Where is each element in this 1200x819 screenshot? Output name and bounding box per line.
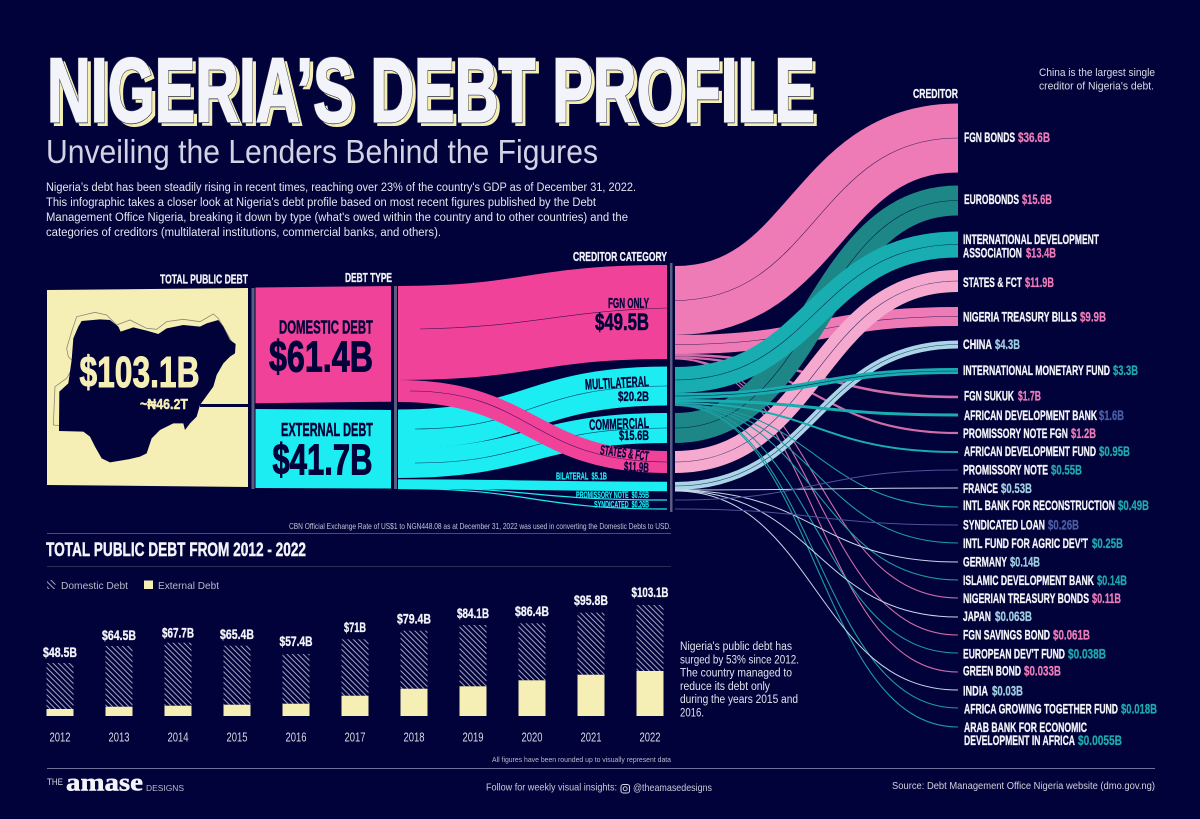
chart annotation: Nigeria's public debt has [680, 641, 792, 653]
label: Nigerian treasury bonds: $0.11B [1092, 591, 1121, 606]
bar 2016: $57.4B [280, 633, 312, 649]
heading: creditor category: CREDITOR CATEGORY [573, 250, 667, 264]
label: IFAD: $0.25B [1092, 536, 1123, 551]
bar 2022: $103.1B [632, 584, 668, 600]
flow: syndicated [398, 488, 667, 509]
bar 2019: $84.1B [457, 605, 489, 621]
flow: multilateral [398, 386, 667, 429]
label: China: $4.3B [995, 337, 1020, 352]
divider bar 2 [394, 286, 397, 489]
label: FGN savings bond: FGN SAVINGS BOND [963, 628, 1050, 642]
chart heading: TOTAL PUBLIC DEBT FROM 2012 - 2022 [46, 539, 306, 561]
divider bar 3 [670, 263, 672, 512]
flow: commercial [398, 428, 667, 463]
heading: creditor: CREDITOR [913, 87, 958, 101]
sankey: creditor category to creditor [675, 138, 958, 727]
chart annotation: The country managed to [680, 668, 792, 680]
label: states and FCT: $11.9B [624, 459, 650, 475]
divider bar 1 [252, 288, 254, 489]
bar 2021: $95.8B [574, 592, 608, 608]
flow: international development association [675, 244, 958, 380]
social follow line: Follow for weekly visual insights: [486, 782, 617, 794]
social follow line [486, 782, 712, 794]
label: Arab Bank: $0.0055B [1078, 733, 1122, 748]
bar 2012 [43, 644, 77, 744]
label: promissory note: $0.55B [1051, 462, 1082, 478]
label: Japan [963, 609, 1032, 624]
flow: promissory note [398, 488, 667, 500]
category labels [556, 296, 650, 510]
heading: debt type: DEBT TYPE [345, 271, 392, 285]
bar 2017: $71B [344, 619, 366, 635]
flow: thin multilateral lenders [675, 404, 958, 727]
logo: the amase designs: amase [66, 770, 143, 796]
flow: FGN bonds [675, 138, 958, 300]
chart legend [47, 580, 219, 592]
bar 2017 [342, 619, 368, 744]
label: FGN only: FGN ONLY [608, 296, 649, 312]
label: India: $0.03B [992, 684, 1023, 698]
title: NIGERIA’S DEBT PROFILE [47, 40, 815, 142]
intro paragraph: categories of creditors (multilateral institutions, commercial banks, and others). [46, 227, 441, 239]
intro paragraph: Nigeria’s debt has been steadily rising in recent times, reaching over 23% of the country's GDP as of December 31, 2022. [46, 182, 636, 194]
label: European dev't fund: $0.038B [1068, 646, 1106, 662]
intro paragraph [46, 182, 636, 239]
label: promissory FGN: PROMISSORY NOTE FGN [963, 426, 1068, 441]
label: states and FCT: STATES & FCT [599, 442, 650, 464]
label: treasury bills: NIGERIA TREASURY BILLS [963, 310, 1077, 324]
label: Arab Bank [964, 720, 1122, 748]
label: France: FRANCE [963, 481, 998, 496]
label: FGN sukuk: FGN SUKUK [964, 388, 1014, 404]
label: Arab Bank: DEVELOPMENT IN AFRICA [964, 733, 1075, 748]
label: eurobonds: $15.6B [1022, 192, 1052, 207]
label: IFAD: INTL FUND FOR AGRIC DEV'T [963, 536, 1088, 551]
panel: total public debt map [47, 288, 248, 487]
bar 2013: 2013 [108, 730, 130, 744]
creditor labels [963, 130, 1157, 748]
label: IDA: $13.4B [1026, 246, 1056, 260]
label: Africa Growing Together Fund: AFRICA GROWING TOGETHER FUND [964, 702, 1118, 716]
label: promissory FGN: $1.2B [1071, 426, 1096, 441]
icon: instagram [621, 784, 630, 793]
bar 2018 [397, 610, 431, 744]
flow: bilateral [398, 484, 667, 486]
label: India [963, 684, 1023, 698]
label: bilateral: BILATERAL $5.1B [556, 470, 607, 482]
label: syndicated loan: $0.26B [1048, 518, 1079, 532]
label: ADF: $0.95B [1099, 444, 1130, 459]
label: China: CHINA [963, 337, 992, 352]
logo: the amase designs: THE [47, 777, 63, 787]
bar 2021: 2021 [580, 730, 602, 744]
label: promissory note: PROMISSORY NOTE [963, 462, 1048, 478]
bar 2018: $79.4B [397, 610, 431, 626]
label: Nigerian treasury bonds: NIGERIAN TREASURY BONDS [963, 591, 1089, 606]
label: green bond: GREEN BOND [963, 664, 1021, 678]
title: NIGERIA’S DEBT PROFILE [47, 40, 815, 142]
bar 2020: $86.4B [515, 603, 549, 619]
note: China largest creditor: creditor of Nigeria's debt. [1039, 80, 1154, 92]
bar 2016 [280, 633, 312, 744]
bar 2013 [102, 627, 136, 744]
title: NIGERIA’S DEBT PROFILE [50, 44, 818, 145]
panel: domestic debt: $61.4B [269, 332, 373, 382]
chart annotation: during the years 2015 and [680, 694, 798, 706]
label: syndicated loan: SYNDICATED LOAN [963, 518, 1045, 532]
chart annotation [680, 641, 799, 719]
label: European dev't fund: EUROPEAN DEV'T FUND [963, 646, 1065, 662]
flow: teal multilateral lenders [675, 371, 958, 452]
flow: Nigeria treasury bills [675, 316, 958, 344]
label: IDA: ASSOCIATION [963, 246, 1022, 260]
bar 2015: $65.4B [220, 626, 254, 642]
intro paragraph: This infographic takes a closer look at Nigeria's debt profile based on most recent figures published by the Debt [46, 197, 597, 209]
label: multilateral [585, 373, 649, 404]
rounding note: All figures have been rounded up to visually represent data [492, 755, 672, 764]
label: states: STATES & FCT [963, 275, 1022, 290]
flow: FGN only [398, 308, 667, 333]
bar 2017: 2017 [344, 730, 366, 744]
label: FGN bonds: FGN BONDS [964, 130, 1015, 145]
flow: pink small lenders [675, 355, 958, 672]
bar 2014 [162, 624, 194, 744]
bar 2019 [457, 605, 489, 744]
label: FGN only: $49.5B [595, 309, 649, 336]
note: China largest creditor [1039, 67, 1155, 92]
bar 2012: $48.5B [43, 644, 77, 660]
label: green bond: $0.033B [1024, 664, 1061, 678]
label: FGN bonds: $36.6B [1018, 130, 1050, 145]
label: Germany: $0.14B [1010, 554, 1040, 570]
bar 2020: 2020 [522, 730, 542, 744]
flow: promissory note and syndicated loan [675, 470, 958, 525]
label: Arab Bank: ARAB BANK FOR ECONOMIC [964, 720, 1087, 735]
heading: total public debt: TOTAL PUBLIC DEBT [160, 272, 248, 286]
bar 2014: 2014 [168, 730, 188, 744]
label: promissory note: PROMISSORY NOTE $0.55B [576, 490, 649, 500]
label: IBRD: $0.49B [1118, 498, 1149, 513]
source: Source: Debt Management Office Nigeria website (dmo.gov.ng) [892, 781, 1155, 792]
note: China largest creditor: China is the largest single [1039, 67, 1155, 79]
bar 2022 [632, 584, 668, 744]
bar 2021 [574, 592, 608, 744]
label: Japan: JAPAN [963, 609, 991, 624]
label: FGN savings bond: $0.061B [1053, 628, 1090, 642]
label: states and FCT [599, 442, 650, 475]
sankey: debt type to creditor category [398, 308, 667, 509]
chart annotation: surged by 53% since 2012. [680, 654, 799, 666]
label: commercial: COMMERCIAL [589, 415, 649, 434]
icon: Nigeria map [53, 312, 236, 462]
social follow line: @theamasedesigns [633, 782, 712, 794]
chart annotation: 2016. [680, 707, 704, 719]
label: FGN only [595, 296, 649, 336]
label: treasury bills: $9.9B [1080, 310, 1106, 324]
label: France: $0.53B [1001, 481, 1032, 496]
bar 2013: $64.5B [102, 627, 136, 643]
title [47, 40, 818, 145]
label: AfDB: AFRICAN DEVELOPMENT BANK [964, 408, 1097, 423]
panel: total public debt map: ~₦46.2T [140, 396, 188, 413]
label: multilateral: $20.2B [618, 388, 649, 404]
panel: external debt [256, 409, 391, 488]
label: Islamic Development Bank: $0.14B [1097, 573, 1127, 588]
label: Islamic Development Bank: ISLAMIC DEVELOPMENT BANK [963, 573, 1094, 588]
label: ADF: AFRICAN DEVELOPMENT FUND [964, 444, 1096, 459]
label: eurobonds: EUROBONDS [964, 192, 1019, 207]
label: Germany: GERMANY [963, 554, 1007, 570]
flow: eurobonds [675, 200, 958, 428]
bar 2015: 2015 [226, 730, 248, 744]
label: IMF: INTERNATIONAL MONETARY FUND [963, 363, 1110, 378]
label: syndicated: SYNDICATED $0.26B [594, 500, 649, 510]
panel: domestic debt [256, 286, 391, 403]
chart annotation: reduce its debt only [680, 681, 770, 693]
logo: the amase designs [47, 770, 184, 796]
flow: states and FCT [675, 281, 958, 462]
exchange rate footnote: CBN Official Exchange Rate of US$1 to NGN448.08 as at December 31, 2022 was used in converting the Domestic Debts to USD. [289, 521, 671, 531]
bar 2022: 2022 [640, 730, 660, 744]
logo: the amase designs: DESIGNS [146, 784, 184, 793]
bar 2012: 2012 [50, 730, 70, 744]
panel: external debt: EXTERNAL DEBT [281, 420, 373, 440]
subtitle: Unveiling the Lenders Behind the Figures [46, 133, 598, 170]
panel: domestic debt: DOMESTIC DEBT [279, 318, 373, 338]
flow: bilateral thin lenders [675, 488, 958, 690]
label: FGN sukuk: $1.7B [1018, 388, 1041, 404]
label: IDA [963, 232, 1099, 260]
label: Japan: $0.063B [995, 609, 1032, 624]
label: IBRD: INTL BANK FOR RECONSTRUCTION [963, 498, 1115, 513]
bar 2020 [515, 603, 549, 744]
flow: China [675, 344, 958, 486]
panel: total public debt map: $103.1B [80, 348, 200, 397]
label: multilateral: MULTILATERAL [585, 373, 649, 394]
flow: states and FCT [398, 391, 667, 462]
label: IMF: $3.3B [1113, 363, 1138, 378]
label: commercial [589, 415, 649, 443]
chart legend: External Debt [158, 580, 219, 592]
intro paragraph: Management Office Nigeria, breaking it down by type (what's owed within the country and to other countries) and the [46, 212, 628, 224]
bar 2019: 2019 [462, 730, 484, 744]
label: IDA: INTERNATIONAL DEVELOPMENT [963, 232, 1099, 247]
bar 2018: 2018 [404, 730, 424, 744]
panel: external debt: $41.7B [272, 436, 372, 484]
label: AfDB: $1.6B [1099, 408, 1124, 423]
bar 2014: $67.7B [162, 624, 194, 640]
label: India: INDIA [963, 684, 988, 698]
bar 2015 [220, 626, 254, 744]
label: commercial: $15.6B [619, 427, 649, 443]
label: Africa Growing Together Fund: $0.018B [1121, 702, 1157, 716]
label: states: $11.9B [1025, 275, 1054, 290]
bar 2016: 2016 [286, 730, 306, 744]
bar chart: total public debt 2012-2022 [43, 584, 668, 744]
chart legend: Domestic Debt [61, 580, 128, 592]
